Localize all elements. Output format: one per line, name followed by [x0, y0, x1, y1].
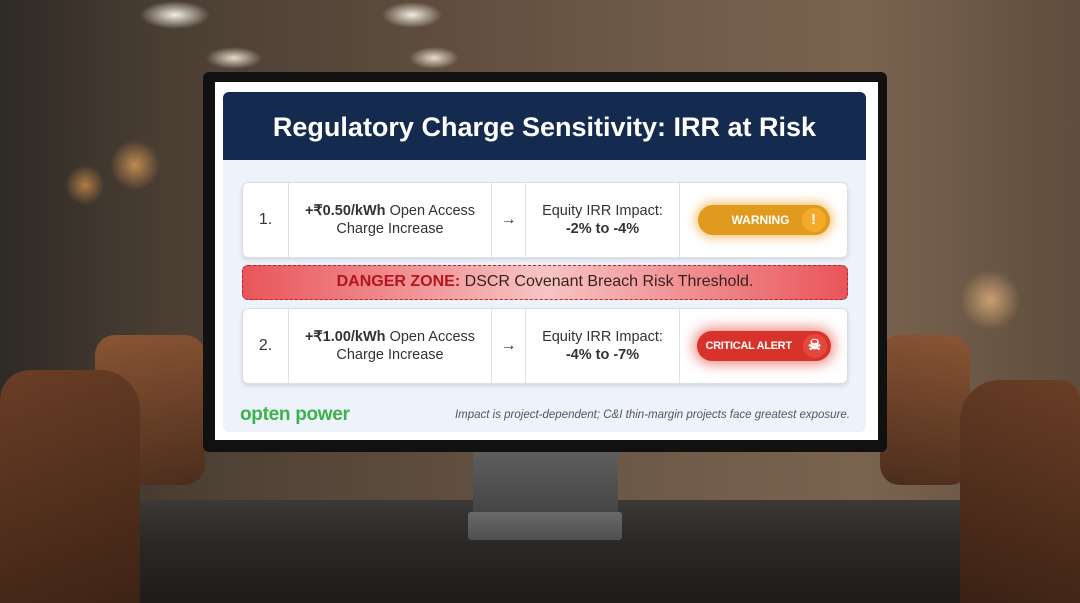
danger zone banner: DANGER ZONE: DSCR Covenant Breach Risk Threshold.: [337, 273, 753, 290]
danger zone banner: [242, 265, 848, 300]
row 1: 1.: [259, 211, 272, 228]
monitor stand: [473, 452, 618, 514]
badge: critical alert: CRITICAL ALERT: [706, 340, 792, 352]
row 2: Equity IRR Impact:: [542, 329, 663, 345]
badge: warning: !: [811, 211, 816, 228]
row 2: +₹1.00/kWh Open Access: [305, 329, 475, 345]
footer: [240, 404, 850, 425]
title: [223, 92, 866, 160]
row 1: Charge Increase: [336, 221, 444, 237]
row 2: -4% to -7%: [566, 347, 639, 363]
logo: opten power: [240, 404, 350, 425]
row 2: →: [500, 337, 516, 354]
row 1: Equity IRR Impact:: [542, 203, 663, 219]
badge: critical alert: ☠: [808, 337, 821, 354]
row 2: [242, 308, 848, 384]
panel: content: [223, 160, 866, 432]
footnote: Impact is project-dependent; C&I thin-margin projects face greatest exposure.: [455, 409, 850, 421]
row 1: [242, 182, 848, 258]
monitor: [203, 72, 887, 452]
row 1: →: [500, 211, 516, 228]
badge: critical alert: [696, 331, 830, 361]
badge: warning: [698, 205, 830, 235]
row 2: 2.: [259, 337, 272, 354]
badge: warning: WARNING: [732, 213, 790, 227]
row 1: +₹0.50/kWh Open Access: [305, 203, 475, 219]
row 2: Charge Increase: [336, 347, 444, 363]
row 1: -2% to -4%: [566, 221, 639, 237]
title: Regulatory Charge Sensitivity: IRR at Risk: [273, 112, 816, 142]
